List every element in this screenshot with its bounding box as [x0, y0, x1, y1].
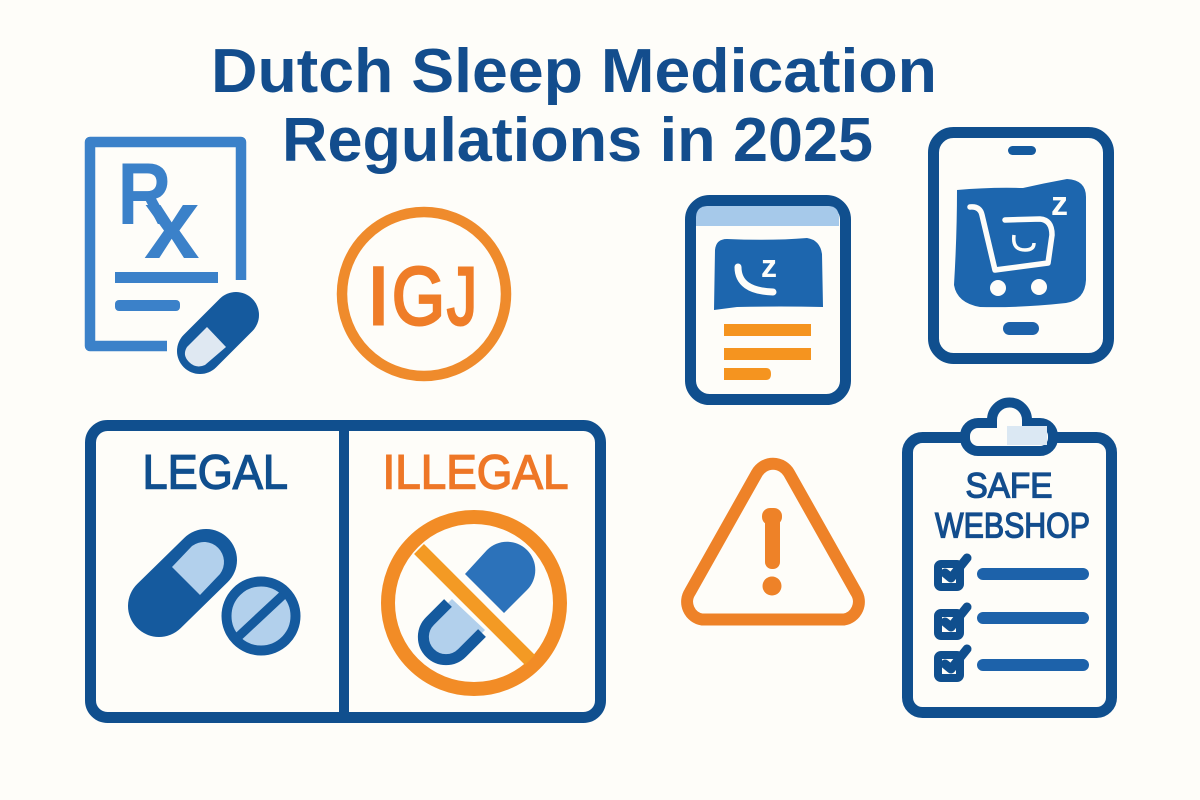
icon: prescription document with capsule: x	[144, 168, 200, 280]
checklist	[938, 558, 1089, 678]
icon: prescription document with capsule: R	[118, 144, 172, 243]
heading: illegal: ILLEGAL	[382, 446, 568, 500]
icon: safe webshop clipboard	[908, 402, 1112, 712]
title: Dutch Sleep Medication	[211, 37, 937, 106]
clipboard heading: SAFE	[966, 466, 1052, 506]
clipboard heading: WEBSHOP	[935, 506, 1090, 546]
icon: web page tablet with sleep advert: z	[761, 248, 777, 284]
icon: IGJ inspectorate badge	[342, 212, 506, 376]
icon: IGJ inspectorate badge: I	[367, 251, 390, 342]
icon: prohibited capsule	[388, 517, 560, 689]
icon: legal tablet	[226, 582, 296, 650]
panel: legal versus illegal medication	[90, 425, 600, 718]
icon: web page tablet with sleep advert	[690, 200, 846, 400]
icon: smartphone with shopping cart	[934, 132, 1108, 358]
icon: legal capsule	[159, 542, 224, 606]
icon: IGJ inspectorate badge: G	[392, 251, 445, 342]
clipboard heading	[935, 466, 1090, 546]
icon: prescription document with capsule	[90, 142, 241, 366]
icon: smartphone with shopping cart: z	[1051, 185, 1068, 223]
icon: warning triangle	[687, 464, 859, 620]
title	[211, 37, 937, 175]
icon: IGJ inspectorate badge: J	[447, 251, 477, 342]
heading: legal: LEGAL	[142, 446, 288, 500]
title: Regulations in 2025	[282, 106, 873, 175]
